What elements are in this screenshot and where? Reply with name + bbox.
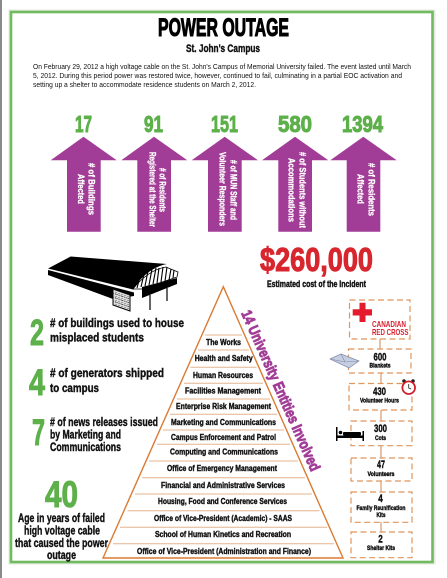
stat: 7 news releases: 7: [32, 412, 45, 453]
stat: 2 buildings: misplaced students: [50, 330, 144, 344]
pyramid of university entities: Office of Emergency Management: [167, 463, 277, 473]
box: 430 volunteer hours: 430: [373, 386, 386, 398]
stat: 40 years: outage: [47, 548, 76, 562]
pyramid of university entities: Financial and Administrative Services: [161, 480, 285, 490]
intro paragraph: setting up a shelter to accommodate residence students on March 2, 2012.: [33, 80, 256, 89]
rotated heading: 14 university entities involved: 14 University Entities Involved: [237, 308, 323, 474]
box: 2 shelter kits: Shelter Kits: [367, 545, 395, 552]
pyramid of university entities: [103, 287, 343, 558]
pyramid of university entities: Enterprise Risk Management: [176, 401, 271, 411]
cost caption: Estimated cost of the Incident: [267, 279, 366, 289]
stat arrow: 17 buildings affected: [51, 111, 117, 232]
stat arrow: 17 buildings affected: # of Buildings: [86, 163, 96, 215]
stat arrow: 151 staff and volunteers: Volunteer Responders: [216, 152, 228, 226]
stat: 4 generators: to campus: [50, 381, 99, 395]
stat: 7 news releases: Communications: [50, 440, 121, 454]
box: 47 volunteers: 47: [377, 459, 385, 471]
pyramid of university entities: Facilities Management: [185, 386, 261, 396]
box: Canadian Red Cross: RED CROSS: [372, 327, 409, 337]
stat arrow: 151 staff and volunteers: # of MUN Staff and: [228, 160, 238, 220]
stat arrow: 580 students without accommodations: [262, 111, 328, 232]
box: 47 volunteers: [351, 458, 412, 481]
box: 600 blankets: 600: [374, 352, 386, 364]
stat: 40 years: high voltage cable: [24, 524, 100, 538]
stat: 40 years: [15, 474, 108, 562]
pyramid of university entities: Marketing and Communications: [171, 417, 276, 427]
stat: 4 generators: # of generators shipped: [50, 366, 164, 380]
stat: 4 generators: [29, 362, 164, 403]
stat: 2 buildings: 2: [30, 312, 44, 353]
cost figure: $260,000: [260, 241, 373, 278]
stat arrow: 91 registered at shelter: 91: [144, 111, 163, 137]
stat arrow: 17 buildings affected: Affected: [75, 174, 86, 204]
box: Canadian Red Cross: [350, 300, 410, 339]
icon: bed: [336, 427, 364, 441]
box: 47 volunteers: Volunteers: [368, 471, 395, 478]
pyramid of university entities: Computing and Communications: [170, 447, 278, 457]
subtitle: St. John's Campus: [186, 43, 260, 55]
icon: building: [48, 256, 178, 311]
box: 4 family reunification kits: 4: [378, 493, 383, 505]
box: Canadian Red Cross: CANADIAN: [372, 319, 406, 329]
intro paragraph: 5, 2012. During this period power was restored twice, however, continued to fail, culminating in a partial EOC activation and: [33, 71, 402, 80]
stat: 40 years: 40: [45, 474, 78, 515]
pyramid of university entities: Office of Vice-President (Administration and Finance): [137, 546, 311, 556]
box: 300 cots: Cots: [375, 435, 386, 442]
box: 430 volunteer hours: [349, 384, 412, 410]
box: 300 cots: [351, 421, 412, 446]
stat arrow: 1394 residents affected: # of Residents: [366, 163, 376, 216]
box: 300 cots: 300: [374, 423, 387, 435]
pyramid of university entities: Human Resources: [193, 370, 253, 380]
intro paragraph: [33, 62, 411, 89]
box: 2 shelter kits: 2: [378, 534, 383, 546]
box: 430 volunteer hours: Volunteer Hours: [360, 397, 399, 404]
stat: 2 buildings: [30, 312, 184, 353]
stat: 7 news releases: # of news releases issued: [50, 415, 158, 429]
stat arrow: 91 registered at shelter: # of Residents: [156, 168, 168, 212]
stat arrow: 580 students without accommodations: Accommodations: [286, 158, 296, 222]
box: 2 shelter kits: [351, 532, 412, 558]
stat arrow: 151 staff and volunteers: 151: [211, 111, 238, 137]
pyramid of university entities: The Works: [206, 337, 241, 347]
pyramid of university entities: Campus Enforcement and Patrol: [171, 432, 276, 442]
stat arrow: 1394 residents affected: [330, 111, 397, 232]
stat: 2 buildings: # of buildings used to house: [50, 316, 184, 330]
stat arrow: 91 registered at shelter: Registered at the Shelter: [146, 152, 158, 227]
box: 4 family reunification kits: [351, 492, 412, 522]
stat: 7 news releases: [32, 412, 158, 454]
box: 600 blankets: [348, 349, 411, 373]
title: POWER OUTAGE: [158, 14, 289, 42]
stat: 40 years: that caused the power: [15, 536, 108, 550]
box: 4 family reunification kits: Family Reunification: [356, 505, 406, 512]
icon: alarm clock: [402, 379, 415, 394]
stat arrow: 1394 residents affected: 1394: [342, 111, 383, 137]
box: 4 family reunification kits: Kits: [376, 512, 386, 519]
pyramid of university entities: Health and Safety: [195, 353, 253, 363]
stat arrow: 151 staff and volunteers: [192, 111, 258, 232]
pyramid of university entities: Office of Vice-President (Academic) - SAAS: [154, 513, 292, 523]
stat arrow: 580 students without accommodations: 580: [278, 111, 312, 137]
stat arrow: 580 students without accommodations: # of Students without: [296, 152, 308, 229]
stat: 4 generators: 4: [29, 362, 45, 403]
pyramid of university entities: Housing, Food and Conference Services: [158, 496, 287, 506]
box: 600 blankets: Blankets: [370, 363, 391, 370]
stat: 7 news releases: by Marketing and: [50, 428, 121, 442]
stat arrow: 91 registered at shelter: [121, 111, 187, 232]
pyramid of university entities: School of Human Kinetics and Recreation: [155, 529, 291, 539]
stat arrow: 1394 residents affected: Affected: [354, 174, 366, 204]
stat arrow: 17 buildings affected: 17: [75, 111, 92, 137]
icon: envelope: [330, 354, 359, 368]
stat: 40 years: Age in years of failed: [18, 511, 105, 525]
connectors between resource boxes: [380, 339, 381, 532]
